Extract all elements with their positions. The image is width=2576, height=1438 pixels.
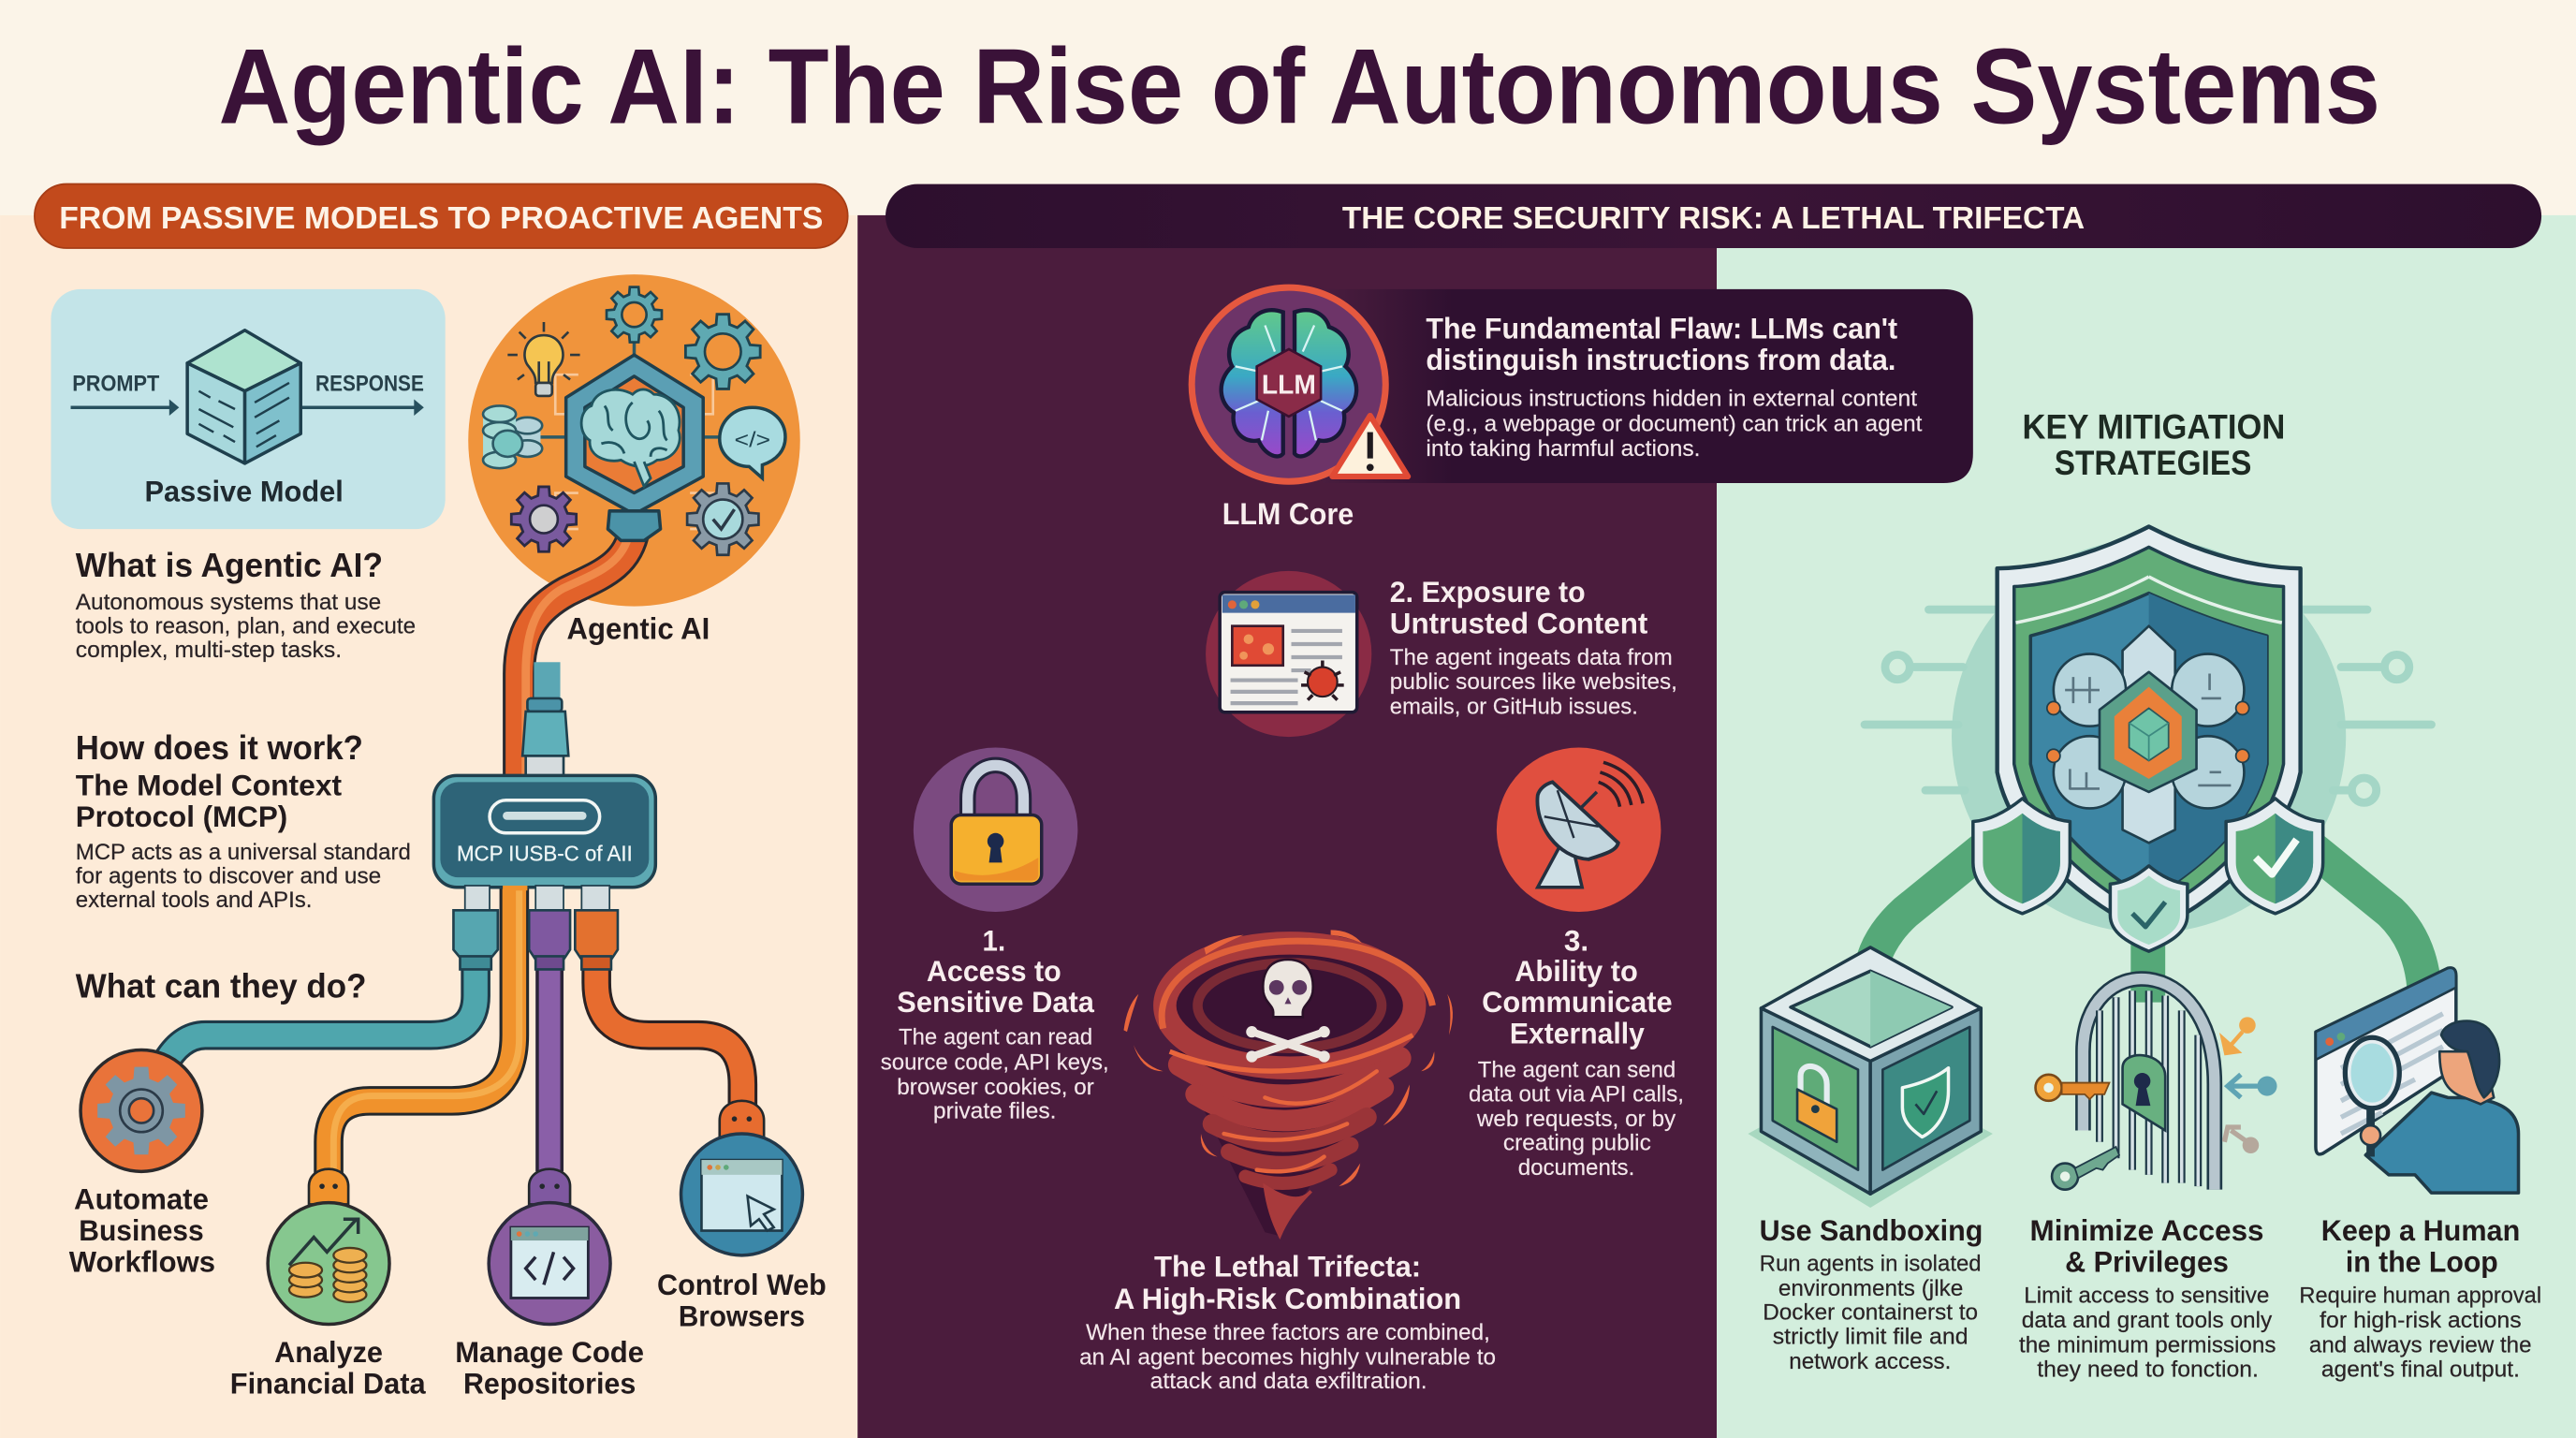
- item 2: exposure to untrusted content: emails, or GitHub issues.: [1390, 695, 1638, 720]
- strategy: minimize access and privileges: the minimum permissions: [2019, 1332, 2276, 1357]
- section header pill: FROM PASSIVE MODELS TO PROACTIVE AGENTS: [59, 201, 823, 236]
- callout: fundamental flaw: Malicious instructions hidden in external content: [1426, 386, 1917, 411]
- MCP connector and cables: [69, 662, 827, 1400]
- item 1: access to sensitive data: source code, API keys,: [881, 1050, 1109, 1076]
- person: [2365, 1093, 2519, 1193]
- item 3: ability to communicate externally: documents.: [1518, 1155, 1634, 1181]
- icon: sandbox cube: [1748, 947, 1993, 1208]
- agentic AI label: Agentic AI: [567, 612, 710, 646]
- orange cable to browsers: [596, 961, 742, 1109]
- section header pill: [35, 184, 848, 248]
- green key: [2052, 1147, 2119, 1190]
- MCP hub box: [433, 775, 655, 888]
- panel background: right mint: [1717, 215, 2576, 1438]
- item 1: access to sensitive data: Access to: [927, 954, 1061, 988]
- icon: code bubble: [720, 407, 785, 478]
- wind sprays: [1123, 930, 1453, 1186]
- icon: brain: [581, 389, 680, 486]
- icon: top gear: [607, 287, 662, 343]
- panel background: middle plum: [857, 215, 1717, 1438]
- item 3: ability to communicate externally: Externally: [1510, 1016, 1645, 1049]
- strategy: minimize access and privileges: [2019, 979, 2277, 1383]
- panel: key mitigation strategies: [1748, 408, 2541, 1383]
- item 1: access to sensitive data: browser cookies, or: [897, 1075, 1094, 1100]
- strategy: use sandboxing: network access.: [1789, 1349, 1951, 1374]
- page background: title band: [0, 0, 2576, 215]
- vortex rings: [1162, 941, 1432, 1071]
- item 3: ability to communicate externally: Ability to: [1515, 954, 1638, 988]
- text block: the lethal trifecta: A High-Risk Combination: [1114, 1282, 1461, 1315]
- warning triangle: [1332, 416, 1408, 477]
- orange key: [2036, 1075, 2110, 1101]
- output port plugs: [453, 886, 618, 969]
- icon: LLM core: LLM: [1262, 370, 1316, 400]
- strategy: keep a human in the loop: [2299, 968, 2541, 1383]
- heading: what can they do: What can they do?: [76, 966, 366, 1005]
- icon: data coins: [483, 405, 542, 468]
- strategy: minimize access and privileges: they need to fonction.: [2037, 1357, 2259, 1383]
- item 2: exposure to untrusted content: Untrusted Content: [1390, 607, 1648, 640]
- strategy: keep a human in the loop: and always review the: [2309, 1332, 2532, 1357]
- response label and arrow: [300, 373, 424, 416]
- icon: reviewer with magnifier: [2316, 968, 2519, 1193]
- prompt label and arrow: PROMPT: [72, 373, 160, 397]
- strategy: use sandboxing: [1748, 947, 1993, 1374]
- padlock on face: [1797, 1066, 1837, 1142]
- item 3: ability to communicate externally: Communicate: [1482, 985, 1673, 1019]
- strategy: minimize access and privileges: Minimize Access: [2030, 1213, 2263, 1247]
- tool: analyze financial data: [230, 1169, 426, 1400]
- heading: STRATEGIES: [2055, 444, 2251, 482]
- skull and crossbones: [1246, 960, 1330, 1063]
- icon: gate with keys: [2036, 979, 2277, 1190]
- icon: LLM core: [1192, 287, 1408, 531]
- item 3: ability to communicate externally: web requests, or by: [1476, 1107, 1676, 1132]
- hexagon agent frame: [566, 355, 703, 540]
- icon: model cube: [187, 330, 300, 463]
- passive model label: Passive Model: [145, 474, 344, 507]
- item 1: access to sensitive data: private files.: [933, 1098, 1057, 1123]
- tool: analyze financial data: Financial Data: [230, 1366, 426, 1400]
- teal cable to automate: [165, 961, 476, 1064]
- strategy: minimize access and privileges: data and grant tools only: [2022, 1308, 2273, 1333]
- callout: fundamental flaw: [1323, 289, 1973, 483]
- text block: what is agentic AI: [76, 546, 416, 663]
- item 2: exposure to untrusted content: public sources like websites,: [1390, 669, 1677, 695]
- access arrows: [2223, 1017, 2277, 1153]
- prompt label and arrow: [71, 373, 179, 416]
- item 3: ability to communicate externally: data out via API calls,: [1469, 1082, 1684, 1108]
- strategy: keep a human in the loop: Keep a Human: [2321, 1213, 2520, 1247]
- circuit background: [1865, 539, 2431, 933]
- agentic AI hub illustration: [468, 274, 800, 785]
- orange cable from hub: [520, 529, 634, 785]
- text block: what is agentic AI: Autonomous systems that use: [76, 590, 381, 615]
- text block: how does it work: MCP acts as a universal standard: [76, 840, 411, 865]
- tool: automate business workflows: Automate: [74, 1182, 209, 1216]
- text block: how does it work: [76, 728, 411, 913]
- title: Agentic AI: The Rise of Autonomous Systems: [218, 28, 2380, 147]
- top connector plug: [522, 662, 568, 775]
- tool: manage code repositories: Repositories: [463, 1366, 636, 1400]
- strategy: use sandboxing: environments (jlke: [1778, 1276, 1963, 1301]
- item 1: access to sensitive data: Sensitive Data: [897, 985, 1094, 1019]
- item 2: exposure to untrusted content: 2. Exposure to: [1390, 575, 1586, 609]
- panel: the core security risk: [881, 184, 2541, 1394]
- strategy: use sandboxing: Docker containerst to: [1763, 1299, 1978, 1325]
- strategy: use sandboxing: strictly limit file and: [1773, 1325, 1969, 1350]
- section header pill: THE CORE SECURITY RISK: A LETHAL TRIFECTA: [1342, 201, 2085, 236]
- section header pill: [886, 184, 2541, 248]
- tool: automate business workflows: Workflows: [69, 1244, 215, 1278]
- icon: check gear: [687, 483, 758, 555]
- tool: control web browsers: Control Web: [657, 1268, 827, 1301]
- strategy: use sandboxing: Run agents in isolated: [1760, 1252, 1982, 1277]
- text block: how does it work: The Model Context: [76, 768, 343, 801]
- tool: manage code repositories: [455, 1169, 644, 1400]
- item 3: ability to communicate externally: The agent can send: [1478, 1057, 1676, 1082]
- text block: the lethal trifecta: The Lethal Trifecta:: [1154, 1250, 1421, 1284]
- icon: satellite dish: [1497, 748, 1661, 912]
- text block: how does it work: external tools and APIs.: [76, 888, 313, 913]
- strategy: keep a human in the loop: Require human approval: [2299, 1284, 2541, 1309]
- strategy: keep a human in the loop: in the Loop: [2346, 1244, 2498, 1278]
- shield on face: [1902, 1068, 1949, 1137]
- MCP hub box: MCP IUSB-C of AII: [457, 842, 633, 866]
- item 2: exposure to untrusted content: The agent ingeats data from: [1390, 645, 1673, 670]
- small shield left: [1973, 799, 2070, 914]
- icon: main shield: [1973, 526, 2323, 951]
- text block: the lethal trifecta: attack and data exfiltration.: [1150, 1369, 1427, 1394]
- funnel body: [1175, 1051, 1399, 1236]
- response label and arrow: RESPONSE: [315, 373, 424, 397]
- strategy: minimize access and privileges: Limit access to sensitive: [2024, 1284, 2269, 1309]
- icon: light bulb: [507, 322, 580, 396]
- text block: what is agentic AI: complex, multi-step tasks.: [76, 638, 342, 663]
- tool: automate business workflows: [69, 1049, 215, 1278]
- text block: how does it work: Protocol (MCP): [76, 800, 287, 833]
- heading: KEY MITIGATION: [2022, 408, 2285, 447]
- tool: control web browsers: Browsers: [679, 1299, 805, 1332]
- icon: large gear: [685, 315, 760, 389]
- strategy: minimize access and privileges: & Privileges: [2065, 1244, 2229, 1278]
- icon: purple gear: [511, 487, 577, 551]
- strategy: keep a human in the loop: for high-risk actions: [2320, 1308, 2522, 1333]
- text block: how does it work: How does it work?: [76, 728, 363, 767]
- icon: code bubble: </>: [735, 427, 770, 451]
- strategy: use sandboxing: Use Sandboxing: [1760, 1213, 1983, 1247]
- tool: automate business workflows: Business: [79, 1213, 204, 1247]
- tool: control web browsers: [657, 1101, 827, 1332]
- magnifier: [2368, 1109, 2373, 1157]
- yellow cable to financial data: [329, 881, 520, 1175]
- callout: fundamental flaw: distinguish instructions from data.: [1426, 343, 1895, 376]
- central gem: [2100, 672, 2197, 792]
- small shield right with check: [2226, 799, 2323, 914]
- item 1: access to sensitive data: The agent can read: [899, 1024, 1092, 1049]
- strategy: keep a human in the loop: agent's final output.: [2321, 1357, 2520, 1383]
- icon: LLM core: LLM Core: [1222, 497, 1354, 531]
- green branches to strategies: [1869, 805, 2424, 1003]
- item 1: access to sensitive data: [881, 748, 1109, 1123]
- panel background: left peach: [0, 215, 857, 1438]
- orange hub circle: [468, 274, 800, 607]
- purple cable to code: [535, 961, 564, 1171]
- text block: what is agentic AI: tools to reason, plan, and execute: [76, 614, 416, 639]
- text block: the lethal trifecta: When these three factors are combined,: [1086, 1320, 1490, 1345]
- central pillar and nodes: [2047, 626, 2249, 843]
- text block: the lethal trifecta: an AI agent becomes highly vulnerable to: [1079, 1345, 1496, 1371]
- passive model card: [51, 289, 446, 529]
- item 1: access to sensitive data: 1.: [983, 923, 1005, 957]
- tool: manage code repositories: Manage Code: [455, 1335, 644, 1369]
- icon: padlock: [914, 748, 1077, 912]
- text block: what is agentic AI: What is Agentic AI?: [76, 546, 383, 584]
- tool: analyze financial data: Analyze: [274, 1335, 383, 1369]
- small shield bottom with check: [2110, 866, 2188, 951]
- item 3: ability to communicate externally: 3.: [1564, 923, 1588, 957]
- icon: tornado with skull: [1123, 930, 1453, 1236]
- text block: the lethal trifecta: [1079, 1250, 1496, 1394]
- callout: fundamental flaw: into taking harmful actions.: [1426, 436, 1701, 462]
- callout: fundamental flaw: The Fundamental Flaw: LLMs can't: [1426, 312, 1898, 345]
- item 2: exposure to untrusted content: [1206, 571, 1677, 737]
- item 3: ability to communicate externally: creating public: [1503, 1131, 1651, 1156]
- brain hemispheres: [1222, 310, 1356, 456]
- callout: fundamental flaw: (e.g., a webpage or document) can trick an agent: [1426, 412, 1923, 437]
- item 3: ability to communicate externally: [1469, 748, 1684, 1181]
- text block: how does it work: for agents to discover and use: [76, 863, 381, 888]
- heading: [2022, 408, 2285, 482]
- panel: from passive models to proactive agents: [35, 184, 848, 1400]
- icon: infected browser: [1206, 571, 1371, 737]
